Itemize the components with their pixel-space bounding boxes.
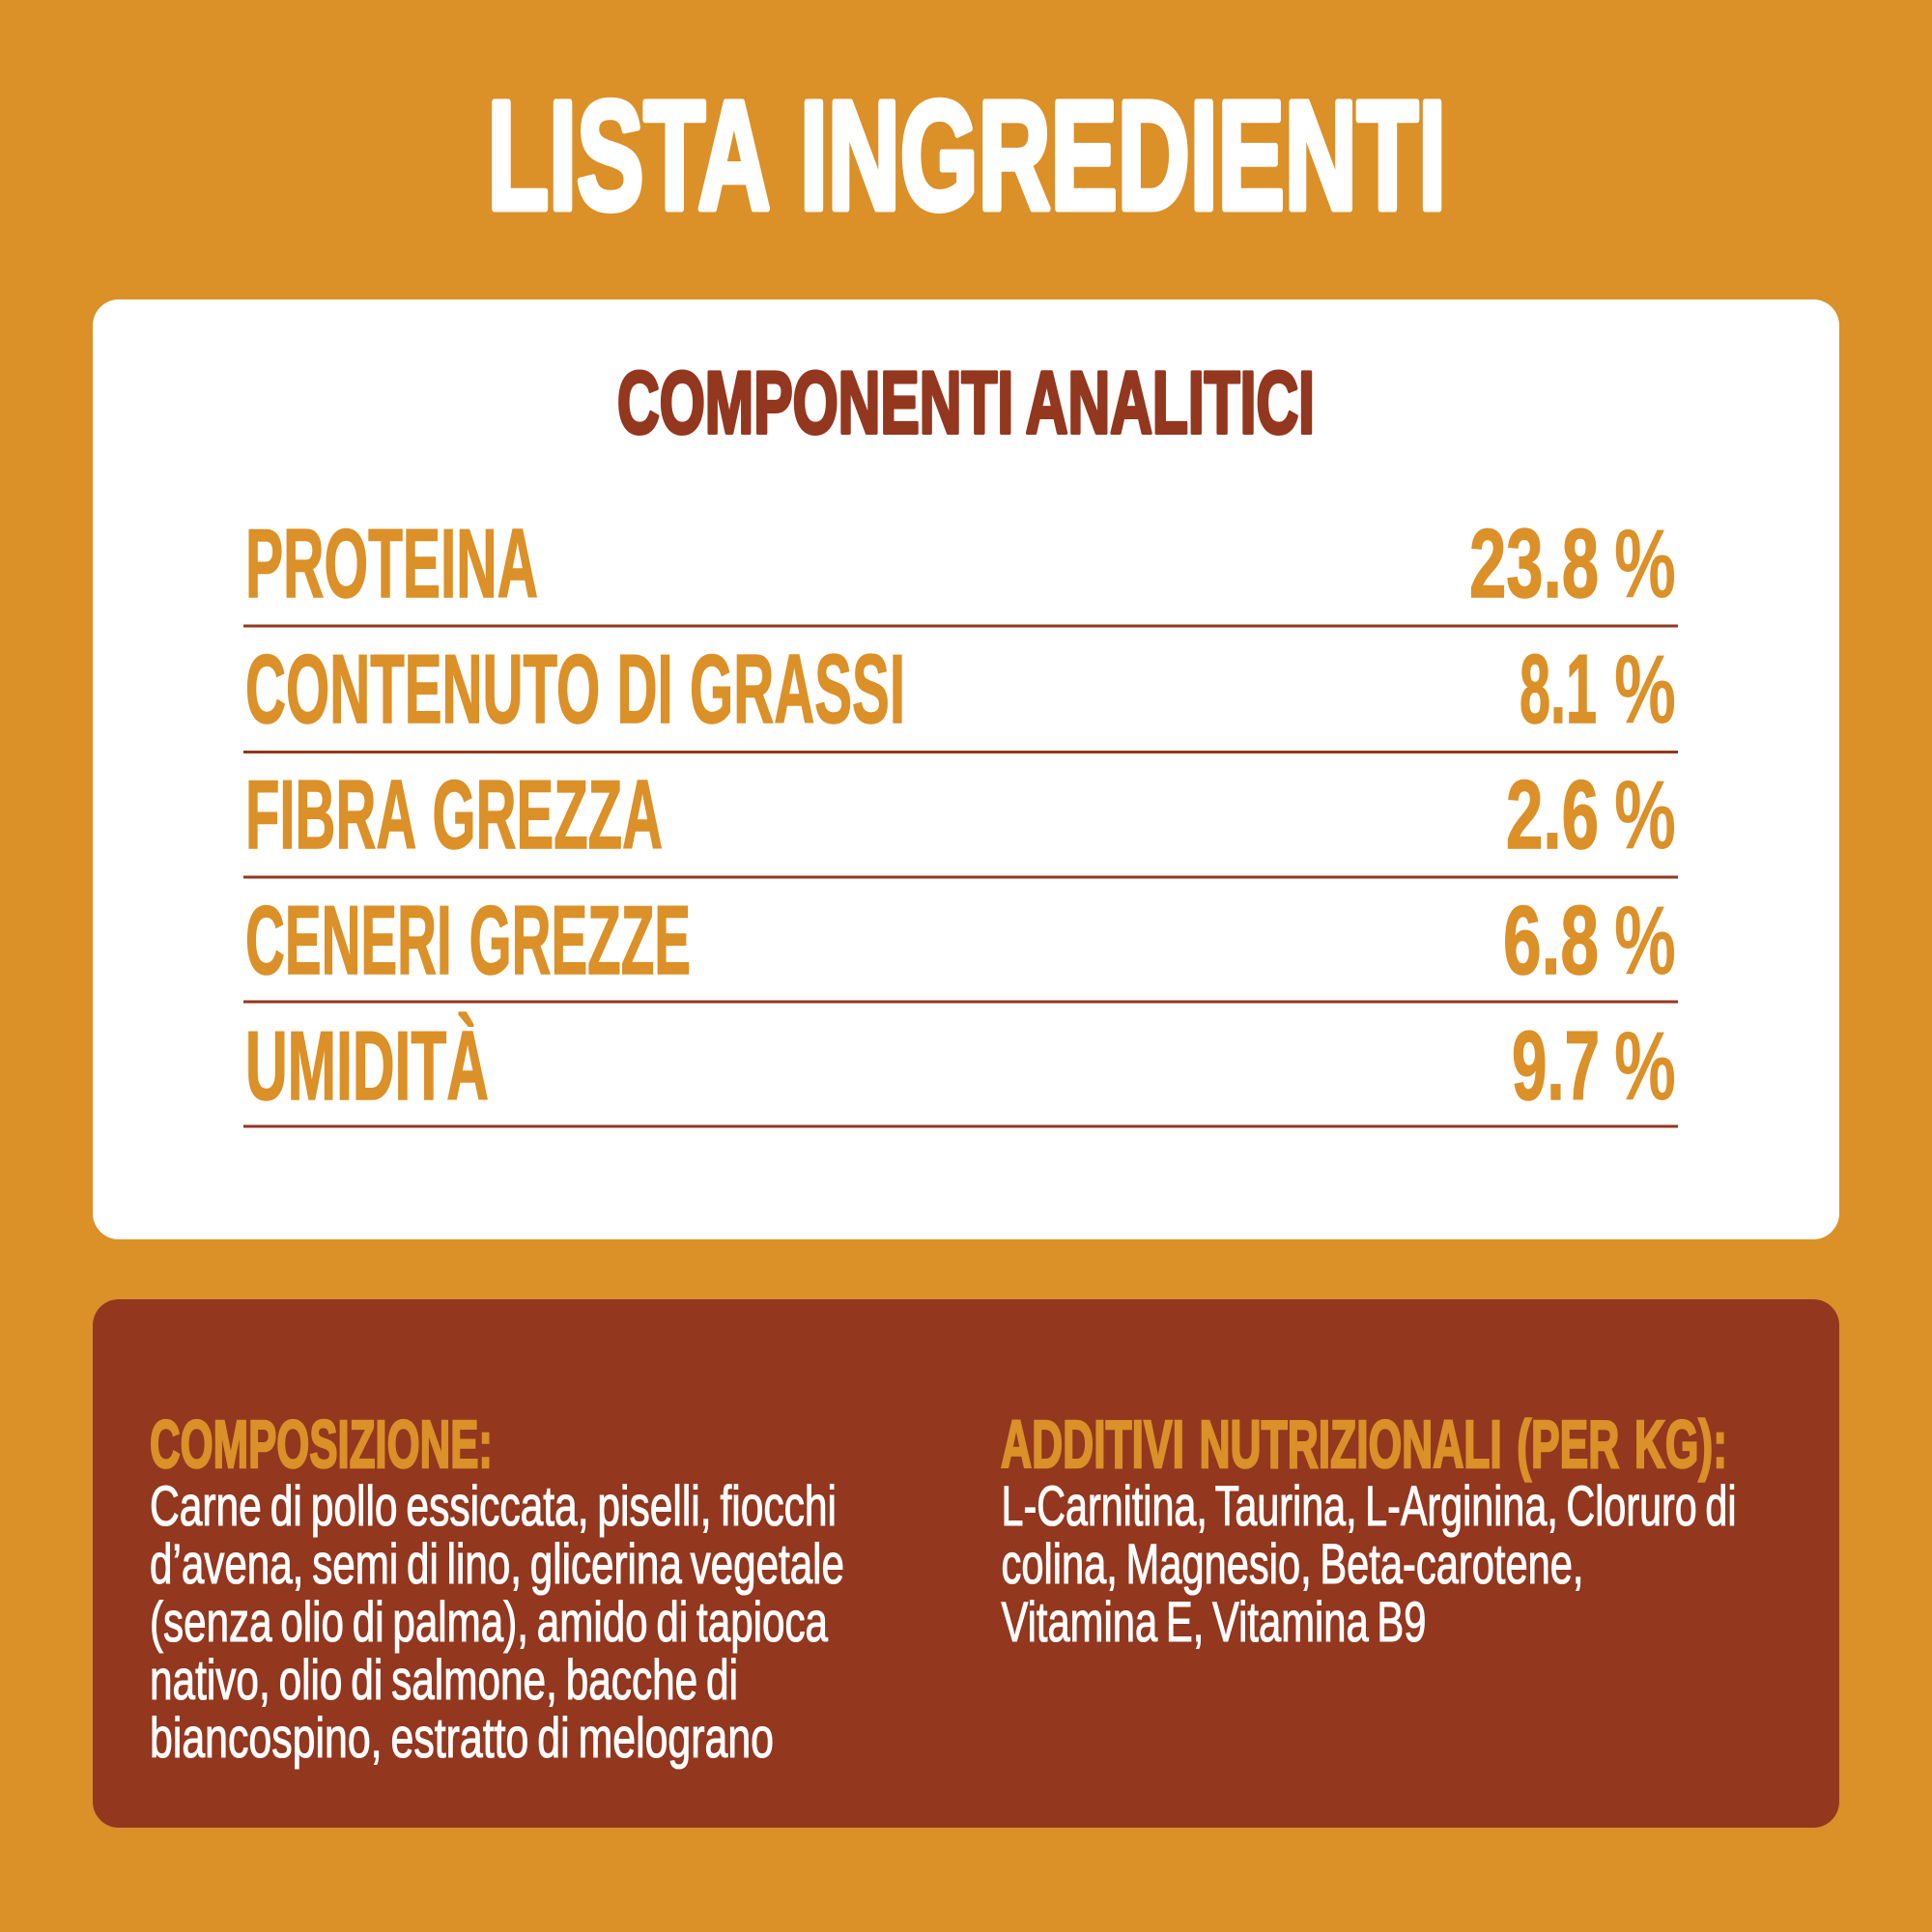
row: proteina: %: [1614, 510, 1676, 618]
row: ceneri grezze: [243, 887, 1678, 1003]
row: fibra grezza: [243, 761, 1678, 879]
text block: composizione: d’avena, semi di lino, glicerina vegetale: [150, 1533, 844, 1596]
row: contenuto di grassi: %: [1614, 636, 1676, 744]
panel: componenti analitici: [93, 299, 1839, 1239]
text block: additivi nutrizionali: Vitamina E, Vitamina B9: [1001, 1591, 1426, 1654]
title: [487, 69, 1446, 242]
row: umidita: UMIDITÀ: [245, 1012, 489, 1121]
row: proteina: [243, 510, 1678, 628]
text block: composizione: [150, 1406, 844, 1770]
row: fibra grezza: FIBRA GREZZA: [245, 761, 663, 869]
row: fibra grezza: %: [1614, 761, 1676, 869]
row: fibra grezza: 2.6: [1506, 761, 1599, 869]
title: LISTA: [487, 69, 771, 242]
row: contenuto di grassi: 8.1: [1520, 636, 1597, 744]
panel: composizione e additivi: [93, 1299, 1839, 1828]
row: ceneri grezze: CENERI GREZZE: [245, 887, 691, 995]
row: proteina: 23.8: [1469, 510, 1599, 618]
heading: componenti analitici: COMPONENTI ANALITICI: [617, 355, 1315, 452]
title: INGREDIENTI: [800, 69, 1446, 242]
row: umidita: [243, 1012, 1678, 1128]
text block: additivi nutrizionali: [1001, 1406, 1737, 1654]
text block: additivi nutrizionali: colina, Magnesio, Beta-carotene,: [1001, 1533, 1584, 1596]
row: contenuto di grassi: CONTENUTO DI GRASSI: [245, 636, 905, 744]
row: ceneri grezze: 6.8: [1503, 887, 1599, 995]
text block: composizione: biancospino, estratto di melograno: [150, 1707, 774, 1770]
text block: composizione: Carne di pollo essiccata, piselli, fiocchi: [150, 1475, 837, 1538]
row: umidita: %: [1614, 1012, 1676, 1121]
text block: composizione: COMPOSIZIONE:: [150, 1406, 493, 1482]
row: umidita: 9.7: [1512, 1012, 1600, 1121]
text block: composizione: nativo, olio di salmone, bacche di: [150, 1649, 738, 1712]
text block: composizione: (senza olio di palma), amido di tapioca: [150, 1591, 829, 1654]
row: proteina: PROTEINA: [245, 510, 538, 618]
row: ceneri grezze: %: [1614, 887, 1676, 995]
